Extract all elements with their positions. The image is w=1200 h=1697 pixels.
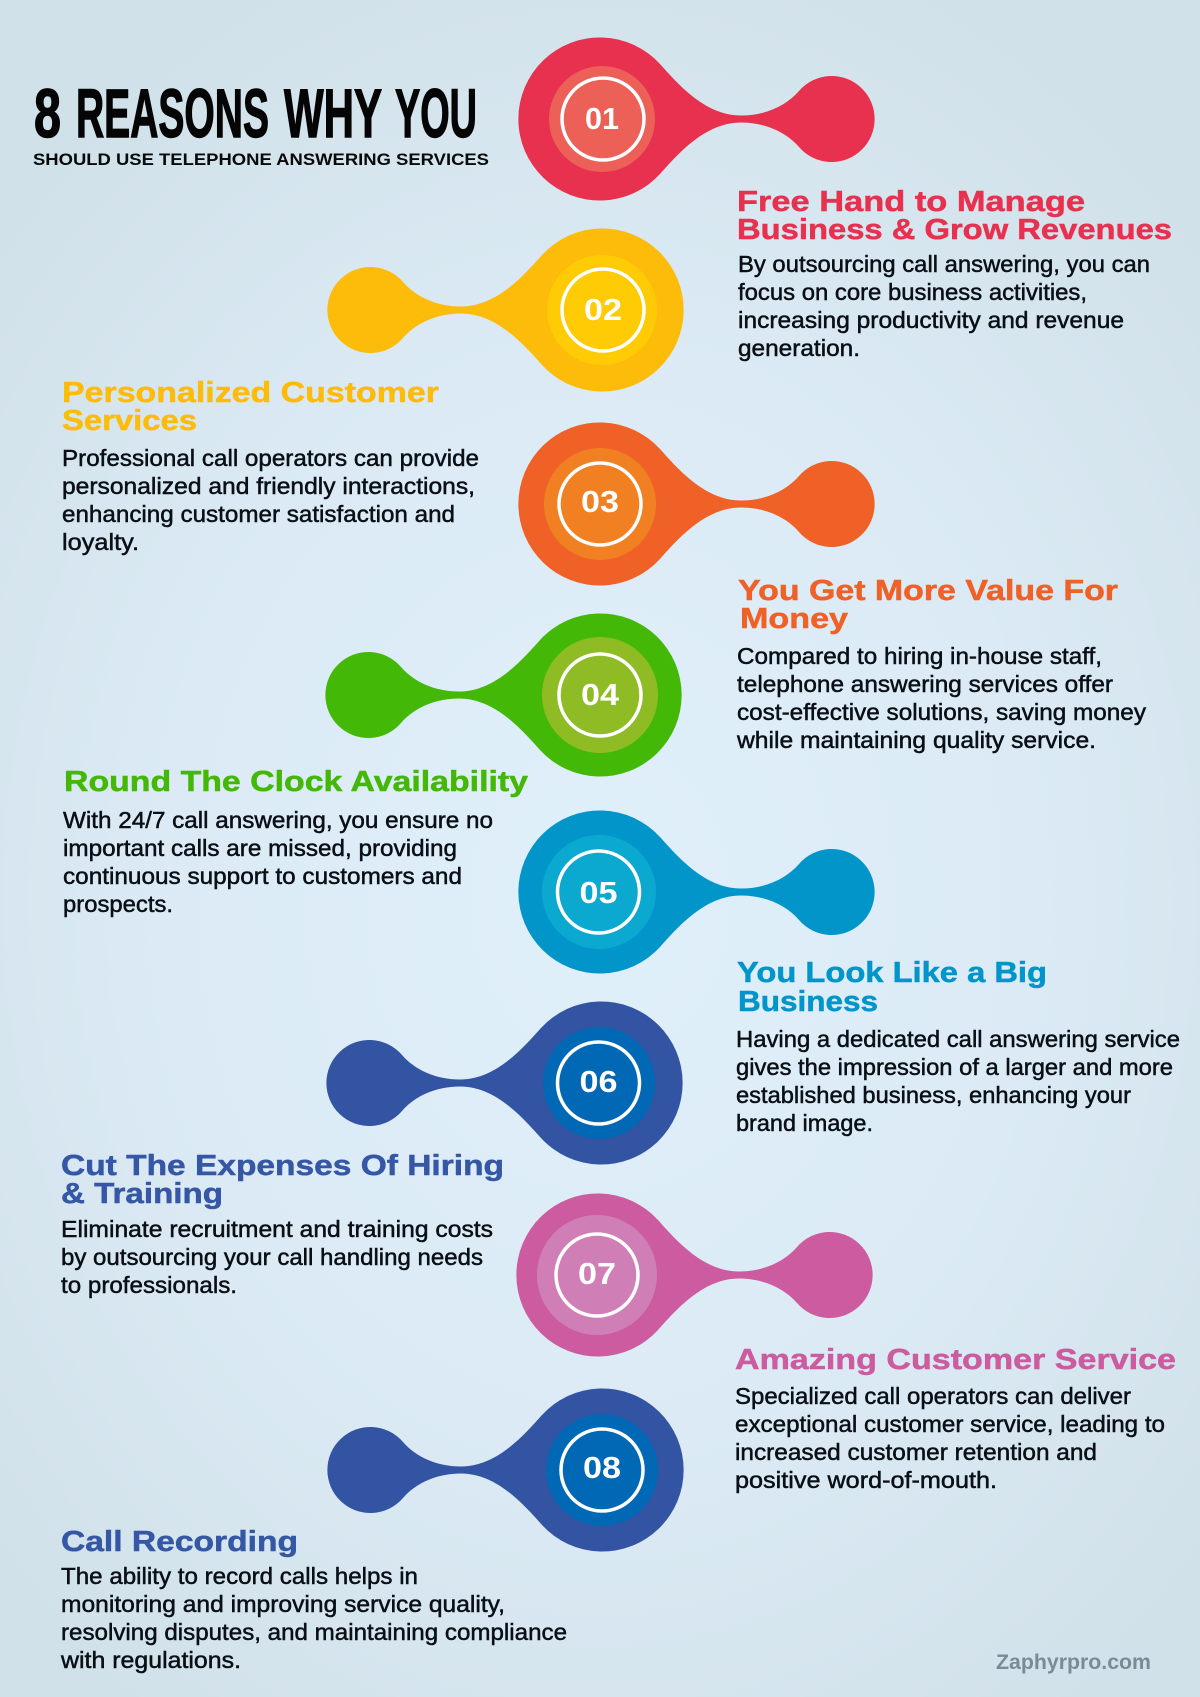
panel: reason 07 text [735, 1344, 1176, 1493]
subtitle: SHOULD USE TELEPHONE ANSWERING SERVICES [33, 151, 489, 169]
heading: Free Hand to Manage [737, 186, 1085, 218]
panel: reason 05 text [736, 957, 1180, 1136]
number: 03 [581, 484, 619, 519]
body text: By outsourcing call answering, you can [738, 251, 1150, 277]
inner circle [543, 1027, 655, 1139]
body text [63, 807, 493, 917]
panel: reason 08 graphic [327, 1388, 684, 1552]
body text: Specialized call operators can deliver [735, 1383, 1131, 1409]
title: REASONS [76, 75, 269, 152]
connector shape [326, 1002, 683, 1164]
heading [737, 957, 1047, 1018]
inner circle [546, 1414, 658, 1526]
ring [562, 78, 644, 160]
body text: focus on core business activities, [738, 279, 1087, 305]
body text: monitoring and improving service quality, [61, 1591, 505, 1617]
body text: exceptional customer service, leading to [735, 1411, 1165, 1437]
connector shape [327, 228, 684, 392]
heading [61, 1150, 504, 1210]
title: 8 [34, 75, 61, 152]
number: 05 [580, 875, 618, 910]
body text: loyalty. [62, 529, 139, 555]
inner circle [547, 255, 657, 365]
body text: important calls are missed, providing [63, 835, 457, 861]
title: YOU [395, 75, 477, 152]
body text [738, 251, 1150, 361]
heading: Services [62, 405, 197, 437]
ring [558, 851, 640, 933]
heading: You Look Like a Big [737, 957, 1047, 989]
body text: to professionals. [61, 1272, 237, 1298]
body text: generation. [738, 335, 860, 361]
heading: Money [740, 603, 848, 635]
panel: reason 02 graphic [327, 228, 684, 392]
number: 02 [584, 292, 622, 327]
heading [738, 575, 1118, 635]
connector shape [516, 1194, 873, 1356]
title block [33, 75, 489, 169]
body text: resolving disputes, and maintaining compliance [61, 1619, 567, 1645]
inner circle [537, 1215, 657, 1335]
panel: reason 02 text [62, 377, 479, 555]
panel: reason 06 text [61, 1150, 504, 1298]
body text: enhancing customer satisfaction and [62, 501, 455, 527]
panel: reason 07 graphic [516, 1194, 873, 1356]
body text: Compared to hiring in-house staff, [737, 643, 1102, 669]
number: 08 [583, 1450, 621, 1485]
ring [556, 1234, 638, 1316]
body text: Professional call operators can provide [62, 445, 479, 471]
body text: personalized and friendly interactions, [62, 473, 475, 499]
ring [561, 1429, 643, 1511]
body text: established business, enhancing your [736, 1082, 1131, 1108]
body text: continuous support to customers and [63, 863, 462, 889]
heading: & Training [61, 1178, 223, 1210]
heading: Amazing Customer Service [735, 1344, 1176, 1376]
heading: Business [738, 986, 878, 1018]
body text [736, 643, 1146, 753]
body text: increased customer retention and [735, 1439, 1097, 1465]
body text: cost-effective solutions, saving money [737, 699, 1146, 725]
panel: reason 03 graphic [518, 422, 875, 586]
connector shape [518, 422, 875, 586]
body text: Having a dedicated call answering service [736, 1026, 1180, 1052]
body text [736, 1026, 1180, 1136]
body text: gives the impression of a larger and more [736, 1054, 1173, 1080]
ring [559, 463, 641, 545]
inner circle [542, 637, 658, 753]
inner circle [542, 835, 656, 949]
ring [559, 654, 641, 736]
panel: reason 01 graphic [518, 38, 875, 200]
body text [62, 445, 479, 555]
heading: Personalized Customer [62, 377, 439, 409]
number: 01 [585, 101, 619, 136]
ring [562, 269, 644, 351]
body text: With 24/7 call answering, you ensure no [63, 807, 493, 833]
heading: Business & Grow Revenues [737, 214, 1172, 246]
body text: brand image. [736, 1110, 873, 1136]
heading: Call Recording [61, 1526, 298, 1558]
heading: You Get More Value For [738, 575, 1118, 607]
number: 06 [580, 1064, 618, 1099]
heading [737, 186, 1172, 246]
body text [61, 1216, 493, 1298]
connector shape [518, 38, 875, 200]
title: WHY [284, 75, 382, 152]
body text: increasing productivity and revenue [738, 307, 1124, 333]
heading [62, 377, 439, 437]
inner circle [544, 448, 656, 560]
ring [558, 1042, 640, 1124]
body text: The ability to record calls helps in [61, 1563, 418, 1589]
inner circle [549, 66, 655, 172]
panel: reason 05 graphic [518, 810, 875, 974]
body text: positive word-of-mouth. [735, 1467, 997, 1493]
body text [735, 1383, 1165, 1493]
body text: with regulations. [60, 1647, 241, 1673]
heading: Round The Clock Availability [64, 766, 528, 798]
panel: reason 08 text [60, 1526, 567, 1673]
body text: prospects. [63, 891, 173, 917]
number: 04 [581, 677, 620, 712]
watermark: Zaphyrpro.com [996, 1651, 1151, 1674]
number: 07 [578, 1256, 616, 1291]
body text: telephone answering services offer [737, 671, 1113, 697]
body text [60, 1563, 567, 1673]
panel: reason 06 graphic [326, 1002, 683, 1164]
panel: reason 01 text [737, 186, 1172, 361]
connector shape [518, 810, 875, 974]
panel: reason 04 text [63, 766, 528, 917]
panel: reason 03 text [736, 575, 1146, 753]
body text: Eliminate recruitment and training costs [61, 1216, 493, 1242]
connector shape [325, 614, 682, 776]
panel: reason 04 graphic [325, 614, 682, 776]
body text: by outsourcing your call handling needs [61, 1244, 483, 1270]
connector shape [327, 1388, 684, 1552]
heading: Cut The Expenses Of Hiring [61, 1150, 504, 1182]
body text: while maintaining quality service. [736, 727, 1096, 753]
